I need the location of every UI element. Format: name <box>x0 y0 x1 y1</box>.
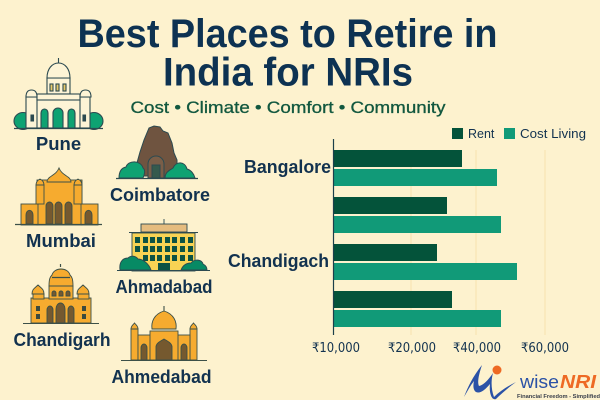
bars: Cost Living <box>334 169 517 327</box>
logo: wiseNRI: NRI <box>560 372 597 392</box>
title <box>78 12 498 94</box>
label: Ahmedabad: Ahmedabad <box>112 366 212 387</box>
label: Mumbai: Mumbai <box>26 230 96 251</box>
label: Chandigarh: Chandigarh <box>14 329 110 350</box>
chart: rent and cost of living bars <box>228 127 586 356</box>
label: Coimbatore: Coimbatore <box>110 184 210 205</box>
logo: wiseNRI: Financial Freedom - Simplified <box>517 394 600 400</box>
axis tick labels: ₹20,000 <box>388 341 436 356</box>
icon: Chandigarh yellow palace <box>23 264 99 324</box>
legend <box>452 127 586 141</box>
icon: Ahmadabad yellow building <box>117 219 210 271</box>
icon: Pune white domed palace <box>14 58 103 130</box>
axis tick labels: ₹60,000 <box>521 341 569 356</box>
category labels: Chandigach <box>228 250 329 271</box>
subtitle: Cost • Climate • Comfort • Community <box>130 98 446 117</box>
icon: Mumbai yellow palace <box>15 168 102 225</box>
category labels <box>228 156 331 271</box>
icon: Ahmedabad yellow mausoleum <box>121 306 207 360</box>
axis tick labels: ₹40,000 <box>453 341 501 356</box>
legend: Rent <box>468 127 495 141</box>
logo: wiseNRI: wise <box>519 372 559 392</box>
axis tick labels <box>312 341 569 356</box>
title: India for NRIs <box>163 50 413 94</box>
icon: Coimbatore rock temple <box>116 126 198 178</box>
label: Ahmadabad: Ahmadabad <box>116 276 212 297</box>
logo: wiseNRI <box>464 365 600 400</box>
label: Pune: Pune <box>36 133 81 154</box>
bars: Rent <box>334 150 462 308</box>
legend: Cost Living <box>520 127 586 141</box>
category labels: Bangalore <box>244 156 331 177</box>
axis tick labels: ₹10,000 <box>312 341 360 356</box>
title: Best Places to Retire in <box>78 12 498 56</box>
